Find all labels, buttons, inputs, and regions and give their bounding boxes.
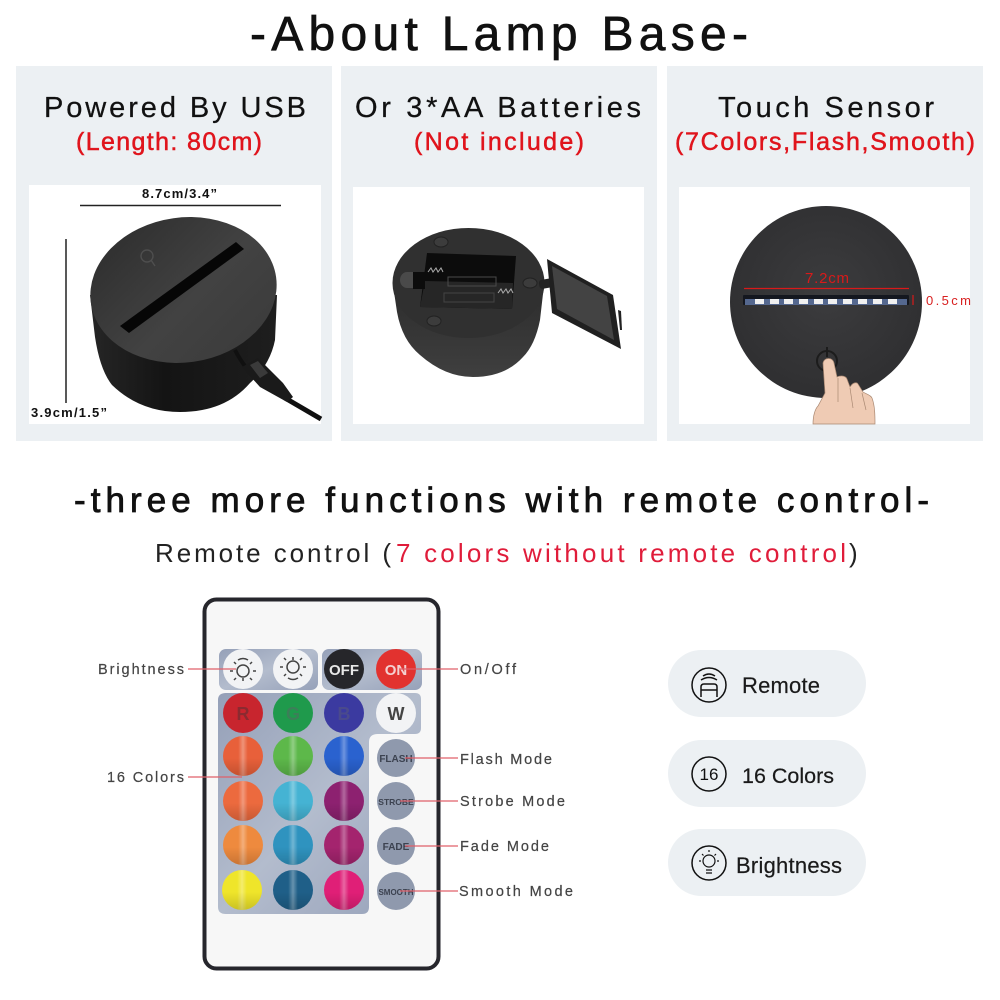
subtitle: remote note: ) (849, 538, 858, 568)
height dimension: 3.9cm/1.5” (31, 405, 107, 420)
button: B: B (338, 704, 350, 724)
pill: brightness: Brightness (736, 853, 842, 878)
icon: 16 (692, 757, 726, 791)
base body (393, 285, 544, 377)
LED slot (743, 295, 909, 305)
disc (730, 206, 922, 398)
USB cable (235, 350, 321, 419)
subheading: not included: (Not include) (414, 128, 584, 156)
title: -About Lamp Base- (250, 8, 748, 61)
panel: AA batteries (341, 66, 657, 441)
button: strobe (377, 782, 415, 820)
button: fade: FADE (383, 842, 410, 853)
callout: on/off: On/Off (460, 662, 517, 678)
pill: brightness (668, 829, 866, 896)
photo: touch sensor disc (679, 187, 971, 424)
callout: brightness: Brightness (98, 662, 184, 678)
button: R: R (236, 704, 250, 724)
button: G: G (286, 704, 300, 724)
button: R (223, 693, 263, 733)
button: flash: FLASH (379, 754, 413, 765)
subheading: cable length: (Length: 80cm) (76, 128, 262, 156)
button: on: ON (385, 662, 407, 679)
battery compartment (420, 253, 516, 309)
slot height dimension: 0.5cm (926, 293, 971, 308)
battery door (547, 259, 622, 349)
heading: batteries: Or 3*AA Batteries (355, 92, 641, 124)
width dimension: 8.7cm/3.4” (142, 186, 217, 201)
icon: 16: 16 (700, 765, 718, 784)
heading: touch sensor: Touch Sensor (718, 92, 934, 124)
section heading: remote functions: -three more functions with remote control- (74, 481, 929, 520)
icon: bulb (692, 846, 726, 880)
lamp base top (81, 205, 286, 375)
touch button (817, 347, 837, 371)
pill: remote: Remote (742, 673, 820, 698)
pill: 16 colors: 16 Colors (742, 764, 834, 788)
pill: remote (668, 650, 866, 717)
lamp base body (90, 295, 277, 412)
callout: on/off (400, 662, 517, 678)
photo: USB lamp base with dimensions (29, 185, 321, 424)
panel: touch sensor (667, 66, 983, 441)
button: smooth: SMOOTH (378, 888, 414, 897)
pointing hand (813, 358, 875, 424)
button: B (324, 693, 364, 733)
button plates (218, 649, 422, 914)
slot length dimension: 7.2cm (805, 270, 849, 287)
button: W: W (388, 704, 404, 724)
callout: strobe mode: Strobe Mode (460, 794, 565, 810)
button: flash (377, 739, 415, 777)
subtitle: remote note: 7 colors without remote control (396, 538, 846, 568)
heading: powered by USB: Powered By USB (44, 92, 306, 124)
callout: brightness (98, 662, 236, 678)
button: brightness down (273, 649, 313, 689)
hinge (538, 277, 557, 289)
touch icon (141, 250, 155, 266)
base underside (392, 228, 544, 338)
button: brightness up (223, 649, 263, 689)
callout: fade mode: Fade Mode (460, 839, 549, 855)
light slot (120, 242, 244, 333)
subtitle: remote note: Remote control ( (155, 538, 391, 568)
callout: flash mode: Flash Mode (460, 752, 552, 768)
callout: 16 colors (107, 770, 242, 786)
remote control (204, 600, 438, 968)
finger notch (400, 272, 425, 289)
panel: powered by USB (16, 66, 332, 441)
button: strobe: STROBE (378, 797, 414, 807)
pill: 16 colors (668, 740, 866, 807)
button: W (376, 693, 416, 733)
button: fade (377, 827, 415, 865)
subheading: modes: (7Colors,Flash,Smooth) (675, 128, 975, 156)
photo: battery compartment (353, 187, 644, 424)
feet (427, 237, 537, 326)
callout: 16 colors: 16 Colors (107, 770, 184, 786)
icon: remote (692, 668, 726, 702)
colour buttons (222, 736, 364, 910)
button: off: OFF (329, 662, 359, 679)
button gloss (222, 736, 364, 910)
button: G (273, 693, 313, 733)
button: on (376, 649, 416, 689)
button: off (324, 649, 364, 689)
callout: smooth mode: Smooth Mode (459, 884, 573, 900)
button: smooth (377, 872, 415, 910)
